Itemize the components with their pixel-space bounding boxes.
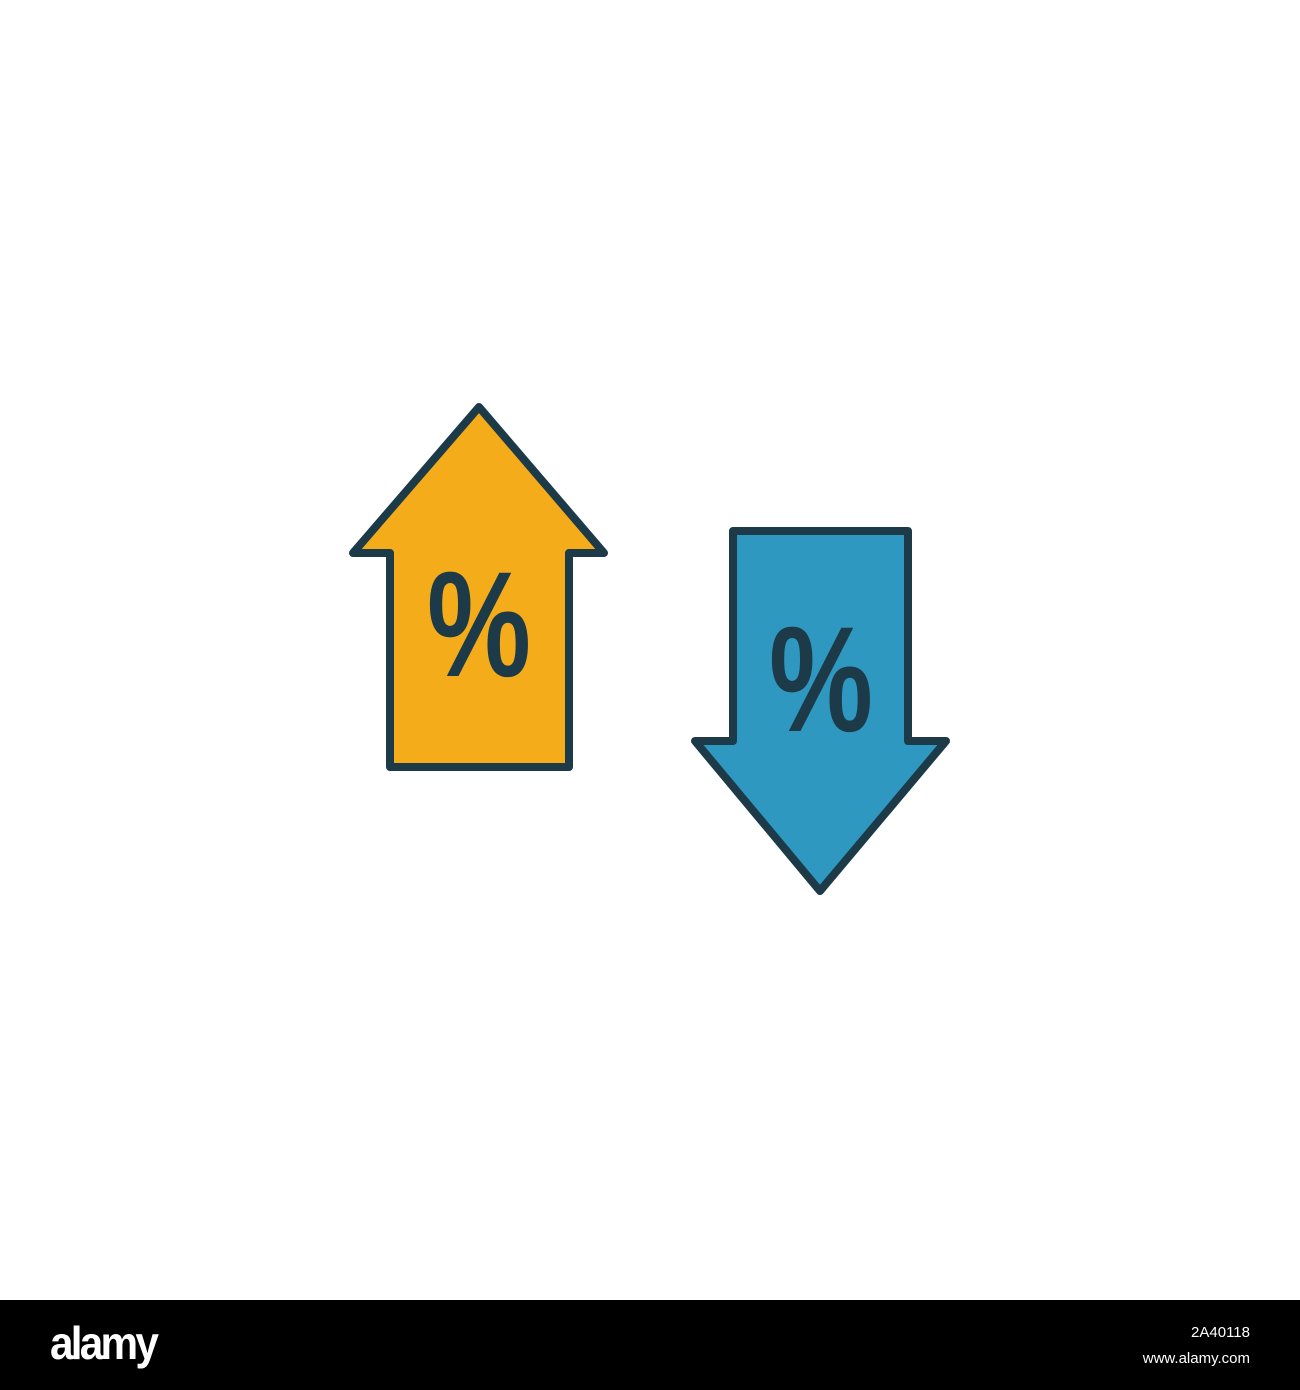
footer bar xyxy=(0,1300,1300,1390)
icon: up arrow orange xyxy=(353,407,604,767)
image id: 2A40118 xyxy=(1191,1324,1250,1341)
icon: up arrow orange: % xyxy=(427,540,531,708)
logo text: alamy xyxy=(50,1317,156,1369)
image id xyxy=(1142,1324,1250,1367)
image id: www.alamy.com xyxy=(1143,1350,1250,1367)
icon: down arrow blue: % xyxy=(769,595,873,763)
icon: down arrow blue xyxy=(695,531,946,891)
